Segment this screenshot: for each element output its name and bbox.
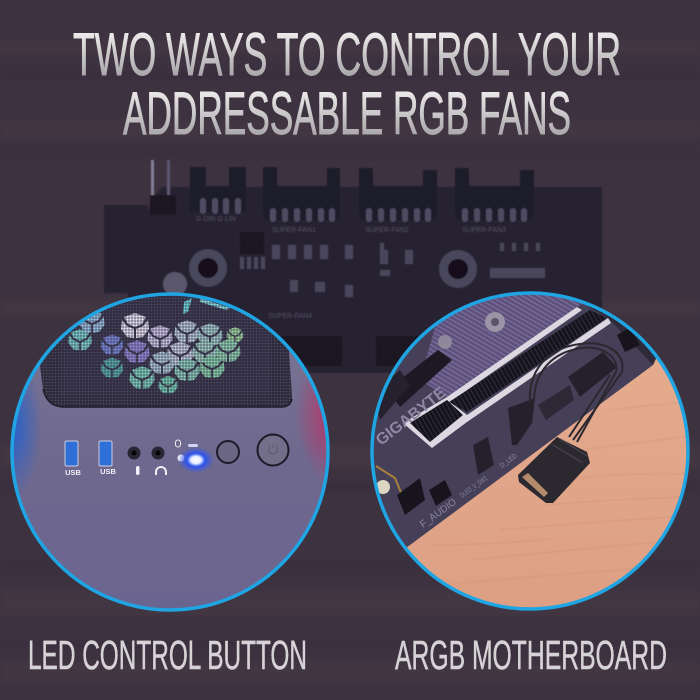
fan controller circuit board [104, 160, 602, 373]
board connector: fan headers [190, 167, 534, 220]
board silkscreen labels: G DIN G LIN [196, 216, 236, 223]
panel: PC case front panel circle [10, 292, 330, 612]
panel: motherboard ARGB header circle [370, 285, 690, 615]
audio jacks [128, 446, 166, 475]
small expansion slot [396, 350, 452, 407]
ARGB cable wires [530, 343, 622, 442]
board connector: pin header [150, 160, 176, 215]
mesh outline [43, 389, 292, 407]
title [73, 21, 621, 147]
GIGABYTE silkscreen: GIGABYTE [373, 384, 450, 449]
power button [258, 434, 288, 466]
mesh top panel [30, 290, 292, 407]
board silkscreen labels [196, 216, 506, 320]
board silkscreen labels: SUPER-FAN3 [462, 227, 506, 234]
header pins row [538, 385, 574, 420]
lower board headers [282, 336, 436, 366]
PCB dark corner [589, 306, 656, 365]
connected header [508, 398, 535, 445]
silkscreen labels: D_LED [499, 453, 519, 470]
board silkscreen labels: SUPER-FAN2 [365, 227, 409, 234]
mounting screw [438, 312, 505, 349]
USB ports: USB [100, 467, 116, 476]
silkscreen labels: F_AUDIO [418, 497, 459, 530]
silkscreen labels [418, 453, 519, 530]
board components [163, 232, 545, 297]
PCIe slot [403, 307, 611, 448]
ARGB connector [518, 437, 590, 503]
USB ports [65, 441, 116, 477]
LED control button glow [178, 447, 214, 473]
headers [397, 328, 640, 515]
indicator icons [176, 440, 198, 462]
capacitor [376, 466, 402, 495]
fan RGB lights [68, 298, 244, 394]
wood grain [634, 403, 678, 443]
board pins [200, 198, 527, 222]
board mounting holes [189, 249, 477, 288]
PCB trace area [426, 294, 582, 397]
board silkscreen labels: SUPER-FAN4 [268, 313, 312, 320]
motherboard PCB [374, 304, 656, 547]
silkscreen labels: DLED_V_SW1 [459, 475, 489, 500]
board silkscreen labels: SUPER-FAN1 [272, 227, 316, 234]
label: LED control button: LED CONTROL BUTTON [28, 632, 307, 678]
USB ports: USB [65, 468, 81, 477]
LED button [217, 441, 239, 463]
